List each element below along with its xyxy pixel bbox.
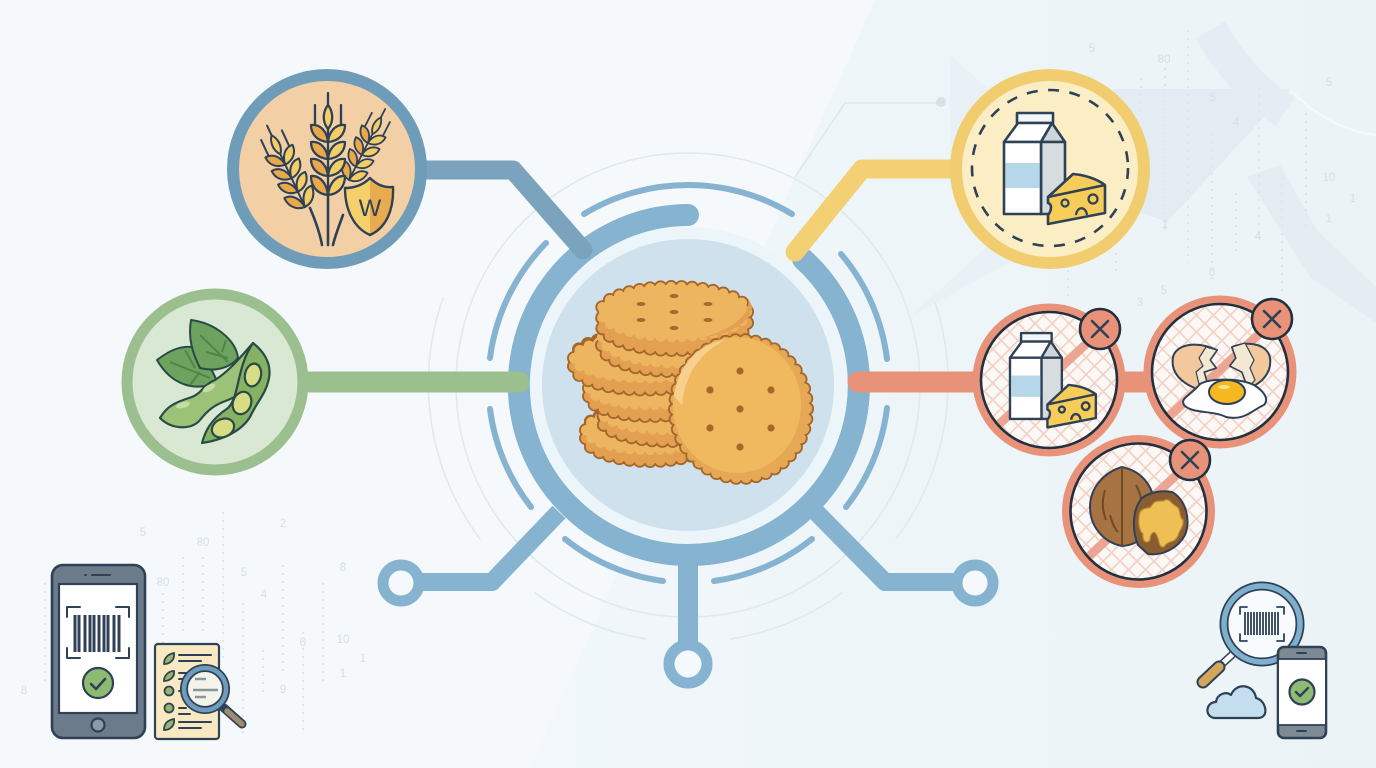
icon: ingredient list with magnifier (155, 644, 242, 739)
icon: wheat stalks (254, 93, 397, 245)
cracker: fifth (600, 391, 740, 443)
magnifier (184, 668, 242, 724)
background data dots and numbers: top right: 5 (1326, 77, 1332, 89)
icon: cracked egg (1173, 343, 1270, 418)
background data dots and numbers: top right: 4 (1233, 117, 1240, 129)
panel: no dairy (977, 308, 1121, 452)
background data dots and numbers: top right: 0 (1209, 267, 1215, 279)
background data dots and numbers: top right: 4 (1255, 231, 1262, 243)
icon: milk and cheese (1010, 333, 1096, 427)
icon: phone scanning barcode (52, 565, 145, 738)
magnifier lens (1224, 586, 1300, 662)
background data dots and numbers: top right: 1 (1162, 219, 1168, 231)
thin back connector to dot (795, 97, 946, 177)
panel: no egg (1148, 299, 1292, 444)
icon: milk and cheese (1004, 113, 1105, 224)
background data dots and numbers: bottom left: 5 (241, 567, 247, 579)
background data dots and numbers: bottom left: 80 (197, 537, 209, 549)
cracker: front (673, 337, 809, 480)
background data dots and numbers: bottom left: 8 (21, 685, 27, 697)
background data dots and numbers: top right: 1 (1326, 213, 1332, 225)
icon: wheat shield: W (359, 195, 382, 222)
connector: dairy to hub (795, 169, 952, 252)
central hub disc (519, 215, 859, 555)
background data dots and numbers: bottom left: 10 (337, 634, 349, 646)
icon: scan magnifier, cloud and phone (1203, 586, 1326, 738)
background data dots and numbers: top right: 5 (1089, 43, 1095, 55)
connector: soy to hub (305, 372, 519, 392)
cracker: bottom (584, 408, 716, 463)
magnifier handle (1203, 653, 1234, 682)
background data dots and numbers: top right: 3 (1137, 297, 1143, 309)
cracker: top (599, 285, 752, 352)
background data dots and numbers: bottom left: 4 (261, 589, 268, 601)
panel: dairy may contain (956, 75, 1144, 263)
background data dots and numbers: top right: 1 (1350, 193, 1356, 205)
connector: allergens to hub (858, 372, 1145, 392)
connector: wheat to hub (425, 170, 583, 250)
background data dots and numbers: bottom left: 0 (300, 637, 306, 649)
icon: cross badge (1252, 299, 1292, 339)
background data dots and numbers: bottom left: 1 (360, 653, 366, 665)
background data dots and numbers: top right: 5 (1161, 285, 1167, 297)
cracker: fourth (587, 368, 713, 418)
icon: soy pods (160, 343, 270, 443)
background data dots and numbers: bottom left: 2 (280, 518, 286, 530)
icon: cross badge (1080, 309, 1120, 349)
panel: soy allergen (127, 294, 303, 470)
phone (1278, 647, 1326, 738)
background data dots and numbers: bottom left: 80 (157, 577, 169, 589)
background data dots and numbers: bottom left: 1 (340, 668, 346, 680)
background data dots and numbers: top right: 80 (1158, 54, 1170, 66)
bottom circuit arms (383, 512, 993, 683)
cloud (1207, 686, 1265, 718)
cracker: second (600, 309, 744, 373)
panel: no tree nuts (1066, 440, 1210, 584)
icon: cross badge (1170, 440, 1210, 480)
background data dots and numbers: bottom left: 5 (140, 527, 146, 539)
icon: wheat shield (345, 178, 393, 235)
background data dots and numbers: bottom left: 8 (340, 562, 346, 574)
icon: soy leaves (157, 320, 238, 387)
background data dots and numbers: top right (1068, 30, 1356, 309)
icon: walnut (1090, 467, 1187, 554)
background data dots and numbers: bottom left (21, 512, 366, 733)
background data dots and numbers: top right: 5 (1210, 92, 1216, 104)
concentric hub rings (428, 153, 948, 639)
panel: wheat allergen (233, 75, 421, 263)
background data dots and numbers: bottom left: 9 (280, 684, 286, 696)
panel: allergen-free group (977, 299, 1292, 584)
central icon: stack of crackers (572, 285, 809, 480)
background data dots and numbers: top right: 10 (1323, 172, 1335, 184)
cracker: third (572, 334, 718, 392)
